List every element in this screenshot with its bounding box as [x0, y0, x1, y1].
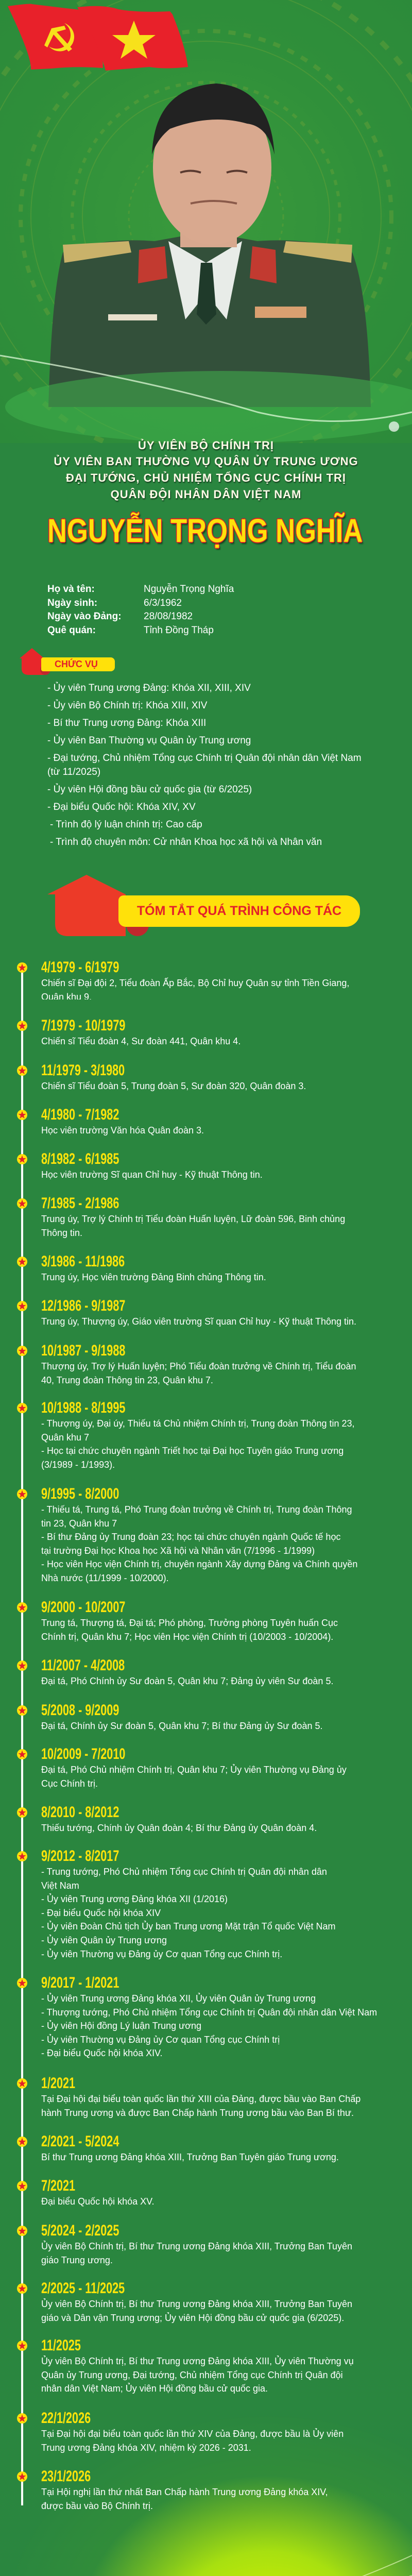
info block: 28/08/1982: [144, 611, 193, 622]
entry 12: Chính trị, Quân khu 7; Học viên Học viện Chính trị (10/2003 - 10/2004).: [41, 1632, 333, 1642]
list: positions: - Bí thư Trung ương Đảng: Khóa XIII: [47, 718, 206, 728]
info block: Tỉnh Đồng Tháp: [144, 625, 214, 636]
entry 12: [17, 1599, 338, 1642]
entry 16: Thiếu tướng, Chính ủy Quân đoàn 4; Bí thư Đảng ủy Quân đoàn 4.: [41, 1823, 317, 1833]
heading lines: QUÂN ĐỘI NHÂN DÂN VIỆT NAM: [111, 488, 301, 501]
entry 3: 11/1979 - 3/1980: [41, 1062, 125, 1079]
entry 10: - Thượng úy, Đại úy, Thiếu tá Chủ nhiệm Chính trị, Trung đoàn Thông tin 23,: [41, 1418, 355, 1429]
entry 3: [17, 1062, 306, 1091]
timeline line: [21, 968, 23, 2505]
entry 21: [17, 2177, 154, 2207]
entry 18: 9/2017 - 1/2021: [41, 1974, 119, 1991]
list: positions: - Trình độ chuyên môn: Cử nhân Khoa học xã hội và Nhân văn: [50, 837, 322, 848]
entry 10: - Học tại chức chuyên ngành Triết học tại Đại học Tuyên giáo Trung ương: [41, 1446, 344, 1456]
entry 18: - Ủy viên Hội đồng Lý luận Trung ương: [41, 2021, 201, 2031]
icon: flags: [8, 4, 188, 71]
entry 6: 7/1985 - 2/1986: [41, 1195, 119, 1212]
entry 13: 11/2007 - 4/2008: [41, 1657, 125, 1674]
entry 13: Đại tá, Phó Chính ủy Sư đoàn 5, Quân khu 7; Đảng ủy viên Sư đoàn 5.: [41, 1676, 333, 1686]
entry 11: tin 23, Quân khu 7: [41, 1518, 117, 1529]
list: positions: - Ủy viên Trung ương Đảng: Khóa XII, XIII, XIV: [47, 683, 251, 693]
entry 10: 10/1988 - 8/1995: [41, 1399, 125, 1416]
entry 18: - Đại biểu Quốc hội khóa XIV.: [41, 2048, 162, 2058]
entry 18: [17, 1974, 377, 2058]
entry 21: 7/2021: [41, 2177, 75, 2194]
entry 10: Quân khu 7: [41, 1432, 89, 1443]
entry 7: [17, 1253, 266, 1282]
entry 5: [17, 1150, 263, 1180]
entry 11: 9/1995 - 8/2000: [41, 1485, 119, 1502]
info block: Ngày vào Đảng:: [47, 611, 122, 622]
entry 1: [17, 959, 349, 999]
entry 26: 23/1/2026: [41, 2468, 91, 2485]
entry 16: 8/2010 - 8/2012: [41, 1804, 119, 1821]
entry 19: 1/2021: [41, 2075, 75, 2092]
badge: chức vụ: [20, 648, 115, 675]
entry 17: [17, 1848, 335, 1959]
badge: chức vụ: CHỨC VỤ: [55, 659, 98, 669]
entry 8: 12/1986 - 9/1987: [41, 1297, 125, 1314]
entry 24: [17, 2337, 354, 2394]
info block: Ngày sinh:: [47, 598, 97, 608]
entry 11: - Bí thư Đảng ủy Trung đoàn 23; học tại chức chuyên ngành Quốc tế học: [41, 1532, 340, 1542]
list: positions: - Ủy viên Ban Thường vụ Quân ủy Trung ương: [47, 735, 251, 746]
entry 20: [17, 2133, 339, 2162]
entry 26: Tại Hội nghị lần thứ nhất Ban Chấp hành Trung ương Đảng khóa XIV,: [41, 2487, 328, 2497]
portrait: [48, 83, 371, 407]
list: positions: - Ủy viên Hội đồng bầu cử quốc gia (từ 6/2025): [47, 784, 252, 795]
entry 22: giáo Trung ương.: [41, 2255, 113, 2265]
entry 14: [17, 1702, 322, 1731]
entry 12: Trung tá, Thượng tá, Đại tá; Phó phòng, Trưởng phòng Tuyên huấn Cục: [41, 1618, 338, 1628]
entry 5: 8/1982 - 6/1985: [41, 1150, 119, 1167]
entry 24: nhân dân Việt Nam; Ủy viên Hội đồng bầu cử quốc gia.: [41, 2383, 268, 2394]
entry 19: hành Trung ương và được Ban Chấp hành Trung ương bầu vào Ban Bí thư.: [41, 2108, 354, 2118]
entry 9: Thượng úy, Trợ lý Huấn luyện; Phó Tiểu đoàn trưởng về Chính trị, Tiểu đoàn: [41, 1361, 356, 1371]
entry 19: [17, 2075, 360, 2118]
entry 24: Quân ủy Trung ương, Đại tướng, Chủ nhiệm Tổng cục Chính trị Quân đội: [41, 2370, 343, 2380]
light swoosh: [0, 354, 412, 443]
entry 6: [17, 1195, 345, 1238]
entry 26: được bầu vào Bộ Chính trị.: [41, 2501, 153, 2511]
entry 14: 5/2008 - 9/2009: [41, 1702, 119, 1719]
entry 23: 2/2025 - 11/2025: [41, 2280, 125, 2297]
background top with drum pattern: [0, 0, 412, 443]
heading lines: [54, 439, 358, 502]
bottom glow: [0, 2267, 412, 2576]
entry 11: - Học viên Học viện Chính trị, chuyên ngành Xây dựng Đảng và Chính quyền: [41, 1559, 357, 1569]
entry 4: Học viên trường Văn hóa Quân đoàn 3.: [41, 1125, 204, 1136]
entry 24: 11/2025: [41, 2337, 81, 2354]
list: positions: - Đại tướng, Chủ nhiệm Tổng cục Chính trị Quân đội nhân dân Việt Nam: [47, 753, 362, 764]
entry 22: [17, 2222, 352, 2265]
info block: Họ và tên:: [47, 584, 95, 595]
entry 7: 3/1986 - 11/1986: [41, 1253, 125, 1270]
entry 9: [17, 1342, 356, 1385]
entry 1: 4/1979 - 6/1979: [41, 959, 119, 976]
entry 11: tại trường Đại học Khoa học Xã hội và Nhân văn (7/1996 - 1/1999): [41, 1546, 315, 1556]
entry 15: 10/2009 - 7/2010: [41, 1745, 125, 1762]
entry 25: Trung ương Đảng khóa XIV, nhiệm kỳ 2026 - 2031.: [41, 2443, 251, 2453]
info block: [47, 583, 234, 636]
entry 17: - Trung tướng, Phó Chủ nhiệm Tổng cục Chính trị Quân đội nhân dân: [41, 1867, 327, 1877]
entry 6: Thông tin.: [41, 1228, 82, 1238]
entry 14: Đại tá, Chính ủy Sư đoàn 5, Quân khu 7; Bí thư Đảng ủy Sư đoàn 5.: [41, 1721, 322, 1731]
entry 11: - Thiếu tá, Trung tá, Phó Trung đoàn trưởng về Chính trị, Trung đoàn Thông: [41, 1504, 352, 1515]
entry 13: [17, 1657, 333, 1686]
entry 12: 9/2000 - 10/2007: [41, 1599, 125, 1616]
entry 15: [17, 1745, 347, 1789]
list: positions: - Trình độ lý luận chính trị: Cao cấp: [50, 819, 202, 830]
entry 25: 22/1/2026: [41, 2410, 91, 2427]
list: positions: - Ủy viên Bộ Chính trị: Khóa XIII, XIV: [47, 700, 207, 711]
entry 2: Chiến sĩ Tiểu đoàn 4, Sư đoàn 441, Quân khu 4.: [41, 1036, 241, 1046]
entry 21: Đại biểu Quốc hội khóa XV.: [41, 2196, 154, 2207]
entry 23: [17, 2280, 352, 2323]
entry 8: [17, 1297, 356, 1327]
info block: Quê quán:: [47, 625, 96, 636]
list: positions: - Đại biểu Quốc hội: Khóa XIV, XV: [47, 802, 196, 812]
entry 10: (3/1989 - 1/1993).: [41, 1460, 115, 1470]
entry 18: - Ủy viên Trung ương Đảng khóa XII, Ủy viên Quân ủy Trung ương: [41, 1993, 316, 2004]
entry 26: [17, 2468, 328, 2511]
list: positions: (từ 11/2025): [47, 767, 100, 777]
entry 20: 2/2021 - 5/2024: [41, 2133, 119, 2150]
info block: 6/3/1962: [144, 598, 182, 608]
info block: Nguyễn Trọng Nghĩa: [144, 584, 234, 595]
entry 15: Đại tá, Phó Chủ nhiệm Chính trị, Quân khu 7; Ủy viên Thường vụ Đảng ủy: [41, 1765, 347, 1775]
entry 18: - Thượng tướng, Phó Chủ nhiệm Tổng cục Chính trị Quân đội nhân dân Việt Nam: [41, 2007, 377, 2018]
entry 17: - Ủy viên Đoàn Chủ tịch Ủy ban Trung ương Mặt trận Tổ quốc Việt Nam: [41, 1921, 335, 1931]
heading lines: ĐẠI TƯỚNG, CHỦ NHIỆM TỔNG CỤC CHÍNH TRỊ: [66, 471, 346, 484]
entry 8: Trung úy, Thượng úy, Giáo viên trường Sĩ quan Chỉ huy - Kỹ thuật Thông tin.: [41, 1316, 356, 1327]
banner: tóm tắt quá trình công tác: [47, 875, 360, 936]
entry 1: Chiến sĩ Đại đội 2, Tiểu đoàn Ấp Bắc, Bộ Chỉ huy Quân sự tỉnh Tiền Giang,: [41, 978, 349, 988]
heading lines: ỦY VIÊN BỘ CHÍNH TRỊ: [138, 439, 274, 452]
entry 2: 7/1979 - 10/1979: [41, 1017, 125, 1034]
entry 23: giáo và Dân vận Trung ương; Ủy viên Hội đồng bầu cử quốc gia (6/2025).: [41, 2313, 344, 2323]
entry 22: 5/2024 - 2/2025: [41, 2222, 119, 2239]
entry 24: Ủy viên Bộ Chính trị, Bí thư Trung ương Đảng khóa XIII, Ủy viên Thường vụ: [41, 2356, 354, 2366]
entry 4: [17, 1106, 204, 1136]
entry 17: 9/2012 - 8/2017: [41, 1848, 119, 1865]
banner: tóm tắt quá trình công tác: TÓM TẮT QUÁ TRÌNH CÔNG TÁC: [137, 904, 341, 918]
entry 22: Ủy viên Bộ Chính trị, Bí thư Trung ương Đảng khóa XIII, Trưởng Ban Tuyên: [41, 2241, 352, 2251]
entry 23: Ủy viên Bộ Chính trị, Bí thư Trung ương Đảng khóa XIII, Trưởng Ban Tuyên: [41, 2299, 352, 2309]
entry 25: [17, 2410, 344, 2453]
entry 17: - Ủy viên Thường vụ Đảng ủy Cơ quan Tổng cục Chính trị.: [41, 1949, 282, 1959]
title: name: NGUYỄN TRỌNG NGHĨA: [47, 512, 363, 549]
entry 17: - Ủy viên Quân ủy Trung ương: [41, 1935, 167, 1945]
entry 11: [17, 1485, 357, 1583]
entry 17: - Ủy viên Trung ương Đảng khóa XII (1/2016): [41, 1894, 228, 1904]
entry 19: Tại Đại hội đại biểu toàn quốc lần thứ XIII của Đảng, được bầu vào Ban Chấp: [41, 2094, 360, 2104]
entry 9: 10/1987 - 9/1988: [41, 1342, 125, 1359]
list: positions: [47, 682, 362, 848]
entry 18: - Ủy viên Thường vụ Đảng ủy Cơ quan Tổng cục Chính trị: [41, 2035, 280, 2045]
entry 17: - Đại biểu Quốc hội khóa XIV: [41, 1908, 161, 1918]
entry 17: Việt Nam: [41, 1880, 79, 1891]
entry 16: [17, 1804, 317, 1833]
entry 6: Trung úy, Trợ lý Chính trị Tiểu đoàn Huấn luyện, Lữ đoàn 596, Binh chủng: [41, 1214, 345, 1224]
entry 11: Nhà nước (11/1999 - 10/2000).: [41, 1573, 169, 1583]
heading lines: ỦY VIÊN BAN THƯỜNG VỤ QUÂN ỦY TRUNG ƯƠNG: [54, 455, 358, 468]
entry 4: 4/1980 - 7/1982: [41, 1106, 119, 1123]
entry 20: Bí thư Trung ương Đảng khóa XIII, Trưởng Ban Tuyên giáo Trung ương.: [41, 2152, 339, 2162]
entry 7: Trung úy, Học viên trường Đảng Binh chủng Thông tin.: [41, 1272, 266, 1282]
entry 5: Học viên trường Sĩ quan Chỉ huy - Kỹ thuật Thông tin.: [41, 1170, 263, 1180]
entry 3: Chiến sĩ Tiểu đoàn 5, Trung đoàn 5, Sư đoàn 320, Quân đoàn 3.: [41, 1081, 306, 1091]
entry 15: Cục Chính trị.: [41, 1778, 98, 1789]
entry 9: 40, Trung đoàn Thông tin 23, Quân khu 7.: [41, 1375, 213, 1385]
entry 10: [17, 1399, 355, 1470]
entry 25: Tại Đại hội đại biểu toàn quốc lần thứ XIV của Đảng, được bầu là Ủy viên: [41, 2429, 344, 2439]
entry 2: [17, 1017, 241, 1046]
